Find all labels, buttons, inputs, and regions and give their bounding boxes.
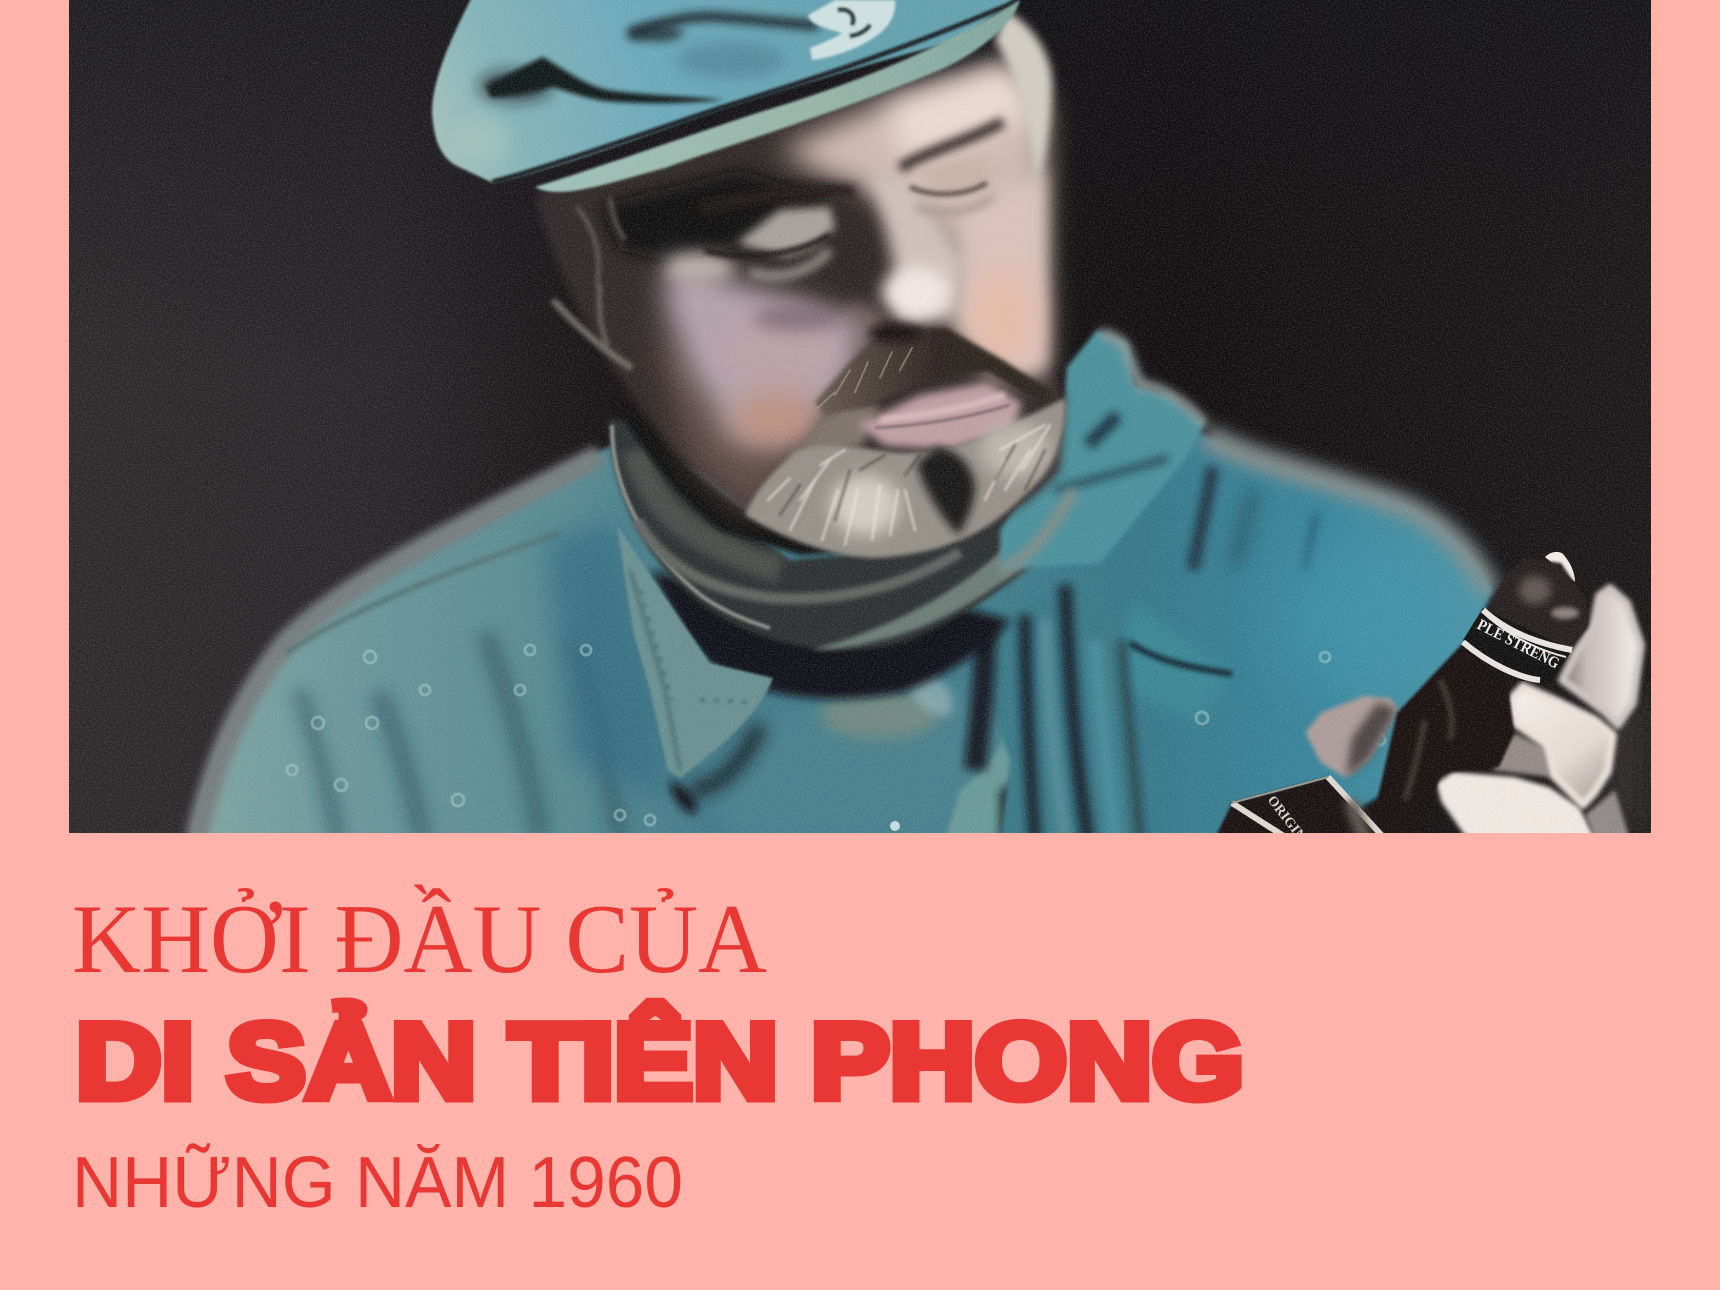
left hair strands [553, 197, 632, 368]
scarf crossing band [812, 550, 1024, 653]
cap visor [535, 0, 1020, 192]
shirt [190, 425, 1493, 840]
mustache [815, 328, 1050, 416]
title line 1: KHỞI ĐẦU CỦA [72, 883, 767, 994]
face [535, 60, 1065, 558]
left shirt collar [617, 525, 773, 815]
lit right side of face [780, 65, 1046, 378]
jaw warm shadow [650, 320, 800, 515]
nostril [869, 324, 921, 342]
title line 2: DI SẢN TIÊN PHONG [76, 1001, 1244, 1121]
gap between fingers [1492, 733, 1550, 777]
finger A [1562, 588, 1641, 725]
shirt button-hole pattern [287, 645, 1385, 825]
cap folds [450, 17, 818, 162]
beret cap [432, 0, 1020, 192]
palm [1585, 790, 1630, 840]
cigar [1368, 558, 1588, 840]
photo: portrait of man with beret and cigar [69, 0, 1651, 844]
dark shadow below scarf [650, 570, 1010, 699]
second cigar with band: ORIGIN [1264, 793, 1308, 844]
right eye [900, 122, 1003, 212]
skin base [535, 60, 1065, 555]
eye socket shadow [600, 170, 835, 262]
mustache flecks [818, 348, 912, 408]
hand holding cigar [1310, 552, 1641, 840]
finger C [1441, 776, 1592, 840]
cigar band: triple strength: PLE STRENG [1474, 616, 1563, 673]
beard [745, 398, 1065, 558]
scarf right folds [1000, 330, 1205, 570]
title block [72, 883, 1244, 1223]
lips [858, 382, 1022, 450]
nose [836, 172, 966, 350]
shirt folds [300, 490, 1255, 840]
left cheek [663, 254, 863, 448]
thumb [1310, 700, 1394, 773]
fingernail top [1545, 552, 1575, 582]
second cigar with band [1214, 777, 1386, 844]
shirt chest opening [682, 676, 1012, 833]
dark neck below beard [614, 400, 952, 558]
photo grain [69, 0, 1651, 833]
scarf hanging end [965, 560, 1150, 840]
hair at right temple [995, 10, 1052, 185]
photo backdrop [69, 0, 1651, 833]
beard top left [790, 405, 880, 458]
scarf around neck [607, 419, 1031, 653]
cap badge [808, 0, 895, 60]
left brow [700, 190, 855, 208]
finger B [1510, 686, 1613, 805]
left eye [705, 207, 835, 276]
subtitle: NHỮNG NĂM 1960 [72, 1143, 683, 1223]
